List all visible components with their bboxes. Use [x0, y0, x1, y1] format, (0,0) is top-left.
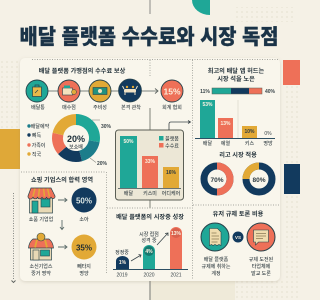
chart legend: 플랫폼: [165, 136, 179, 142]
decoration: navy block: [284, 164, 300, 194]
bar: delivery 50%: 50%: [123, 139, 134, 145]
icon labels: 본격 관착: [121, 104, 141, 111]
bar labels: 영방: [263, 140, 273, 147]
arrow: store to 50%: [58, 198, 67, 202]
icon labels: [31, 104, 182, 111]
growth labels: 정정중: [115, 249, 129, 256]
title: 배달 플랫폼 수수료와 시장 독점: [20, 26, 278, 49]
icon: money: [58, 80, 80, 102]
panel: bar chart platform vs fee: [116, 108, 184, 208]
icon labels: 주비성: [93, 104, 107, 111]
donut chart: 30%: [101, 124, 112, 130]
bar labels: 어디케어: [162, 190, 181, 197]
bar labels: 예열: [221, 140, 230, 147]
bar labels: 키스: [245, 140, 254, 147]
icon: 15% circle: [161, 80, 183, 102]
icon: 15% circle: 15%: [163, 86, 181, 96]
bar: 2020: 4%: [145, 249, 153, 255]
bar: 10%: 10%: [244, 129, 255, 135]
donut chart: [52, 114, 112, 167]
bar labels: 배달: [124, 190, 133, 197]
panel: market share: [195, 67, 276, 147]
donut legend: [27, 123, 50, 158]
icon labels: 배달통: [31, 104, 45, 111]
donut legend: 배달예약: [31, 123, 50, 130]
growth labels: 성격 중: [141, 237, 157, 244]
panel: regulation debate: [201, 210, 275, 277]
icon: speech bubble: [247, 223, 275, 251]
heading: regulation debate: 유저 규제 토론 비용: [213, 210, 264, 218]
donut chart: 보쇼배: [69, 144, 83, 150]
decoration: teal half circle: [192, 0, 210, 15]
panel: small business impact: [28, 176, 96, 277]
decoration: left dotted arrow: [12, 193, 16, 282]
bar labels: 배달: [203, 140, 212, 147]
heading: market share: 시장 석을 노은: [217, 75, 255, 83]
heading: market share: [208, 67, 265, 83]
bar labels: 키스미: [143, 190, 157, 197]
donut chart: 20%: [97, 161, 108, 167]
icon: banknote: [89, 80, 111, 102]
heading: fee compensation: 배달 플랫폼 가맹점의 수수료 보상: [39, 67, 126, 75]
donut callouts: [92, 119, 100, 121]
icon: navy people: [118, 79, 142, 102]
donut center label: 20%: [67, 134, 85, 144]
bar: 53%: 53%: [202, 102, 213, 108]
arrow: down: [60, 220, 64, 230]
labels: 소신기업스: [29, 263, 53, 270]
stacked legend bar: 11%: [200, 89, 210, 95]
icon: VS: VS: [235, 235, 241, 240]
stacked legend bar: [200, 88, 276, 95]
bar: 13%: 13%: [220, 121, 231, 127]
panel: platform fee compensation: [26, 67, 183, 111]
donut legend: 직국: [32, 151, 41, 158]
growth labels: [115, 231, 159, 256]
debate labels: 규제에 취하는: [202, 263, 231, 270]
donut: 80%: 80%: [252, 177, 266, 184]
arrow to 15% circle: [155, 88, 158, 94]
labels: 중거 영약: [31, 270, 51, 277]
year labels: 2020: [143, 272, 155, 278]
debate labels: 배달 플랫폼: [204, 256, 229, 263]
circle: 50%: 50%: [76, 196, 92, 206]
heading: market share: 최고의 배달 앱 허드는: [208, 67, 265, 75]
labels: [29, 263, 91, 277]
value: 0%: 0%: [264, 131, 272, 137]
labels: 영양: [79, 270, 89, 277]
bar labels: [124, 190, 181, 197]
donut legend: 가족이: [32, 142, 45, 149]
icon labels: 매수점: [62, 104, 76, 111]
donut: 70%: 70%: [210, 177, 224, 184]
heading: market adoption: 리고 시장 적용: [219, 151, 257, 159]
year labels: [116, 272, 182, 278]
donut: 70%: [204, 166, 230, 192]
debate labels: 타업체에: [252, 263, 271, 270]
labels: 쇼품 기업업: [29, 216, 54, 223]
chart legend: [159, 136, 179, 150]
panel: market growth: [113, 213, 188, 278]
donut legend: 뼈득: [32, 132, 41, 139]
donut: 80%: [246, 166, 272, 192]
heading: market growth: 배달 플랫폼의 시장중 성장: [116, 213, 184, 221]
icon: store 1: [28, 188, 55, 213]
arrow: chart to right panel: [169, 120, 190, 130]
connector line: [37, 90, 158, 92]
icon: bag: [26, 80, 48, 102]
debate labels: 계정: [211, 270, 221, 277]
labels: 빼타지: [77, 263, 91, 270]
bar: 33%: 33%: [145, 159, 156, 165]
labels: 소아: [79, 216, 89, 223]
icon: document: [201, 223, 229, 251]
stacked legend bar: 40%: [265, 89, 276, 95]
circle: 35%: 35%: [76, 244, 92, 252]
growth arrows: [131, 233, 168, 261]
chart legend: 수수료: [165, 144, 179, 150]
heading: small business: 쇼핑 기업스의 합력 영역: [31, 176, 93, 184]
icon labels: 회계 협회: [162, 104, 182, 111]
decoration: mustard block: [0, 129, 20, 169]
labels: [29, 216, 89, 223]
year labels: 2021: [170, 272, 182, 278]
debate labels: 규제 도전된: [249, 256, 274, 263]
decoration: coral block: [283, 60, 300, 85]
main panel: [20, 58, 280, 281]
debate labels: 발교 도론: [251, 270, 271, 277]
arrow: store to 35%: [58, 245, 67, 249]
bar labels: [203, 140, 273, 147]
bar: 2021: 13%: [171, 231, 182, 237]
year labels: 2019: [116, 272, 128, 278]
debate labels: [202, 256, 274, 277]
icon: store 2: [28, 233, 54, 260]
bar: 2019: 1%: [119, 260, 127, 266]
bar: 16%: 16%: [166, 170, 177, 176]
growth labels: 시장 접점: [139, 231, 159, 238]
